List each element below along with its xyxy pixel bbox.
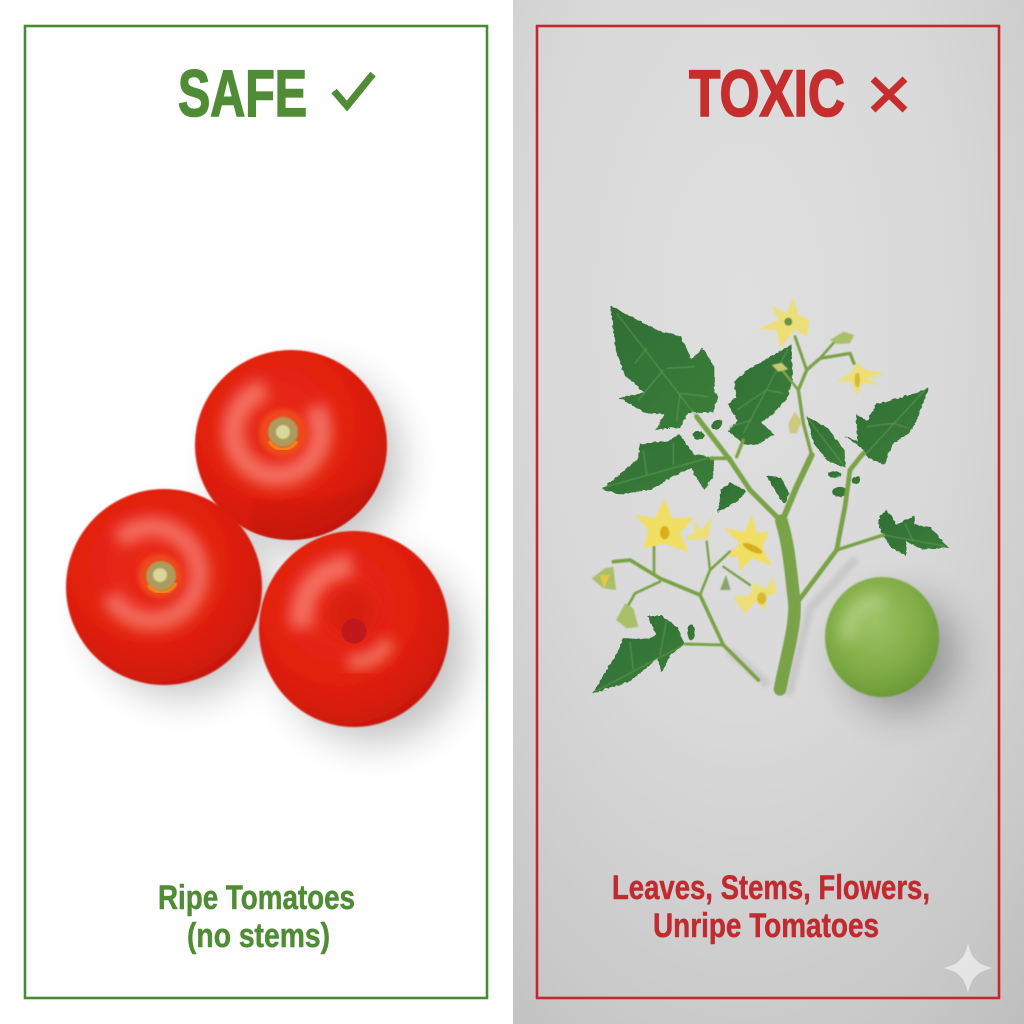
leaves bbox=[591, 305, 948, 693]
tomato shadows bbox=[92, 372, 466, 742]
frame: safe border bbox=[25, 26, 487, 998]
flower: lower drooping bbox=[733, 577, 777, 614]
stems bbox=[613, 337, 883, 689]
icon: cross mark bbox=[873, 79, 905, 110]
frame: toxic border bbox=[537, 26, 999, 998]
flower: top bbox=[758, 297, 809, 348]
green tomato shadow bbox=[844, 598, 956, 710]
icon: sparkle watermark bbox=[943, 943, 993, 993]
tomato: top bbox=[195, 350, 387, 540]
heading text: SAFE: SAFE bbox=[178, 56, 307, 130]
flower: center bbox=[724, 515, 773, 571]
caption: safe: (no stems) bbox=[187, 917, 330, 955]
flower: upper right drooping bbox=[837, 363, 885, 396]
panel: toxic background bbox=[513, 0, 1024, 1024]
caption: safe: Ripe Tomatoes bbox=[158, 879, 355, 917]
leaf veins bbox=[595, 313, 945, 692]
tomato blossom dimple bbox=[342, 618, 366, 644]
heading text: TOXIC: TOXIC bbox=[689, 56, 845, 130]
tomato: left bbox=[66, 489, 262, 685]
illustration: tomato plant bbox=[591, 297, 948, 695]
panel: safe background bbox=[0, 0, 513, 1024]
plant shadow bbox=[728, 558, 857, 695]
flower: large left bbox=[635, 498, 694, 552]
caption: toxic: Leaves, Stems, Flowers, bbox=[612, 869, 930, 907]
flower buds bbox=[592, 332, 854, 628]
heading: toxic bbox=[689, 56, 905, 130]
tomato: right bbox=[259, 531, 449, 727]
illustration: three ripe tomatoes bbox=[66, 350, 466, 742]
caption: safe bbox=[158, 879, 355, 955]
green tomato highlight bbox=[848, 602, 884, 640]
caption: toxic bbox=[612, 869, 930, 945]
green tomato body bbox=[825, 577, 939, 697]
illustration: unripe green tomato bbox=[825, 577, 956, 710]
tomato stem scar bbox=[268, 417, 298, 447]
caption: toxic: Unripe Tomatoes bbox=[653, 907, 879, 945]
flowers bbox=[635, 297, 885, 614]
heading: safe bbox=[178, 56, 373, 130]
tomato stem scar bbox=[146, 561, 176, 591]
flower: small side bloom bbox=[683, 517, 712, 540]
icon: check mark bbox=[334, 74, 373, 106]
